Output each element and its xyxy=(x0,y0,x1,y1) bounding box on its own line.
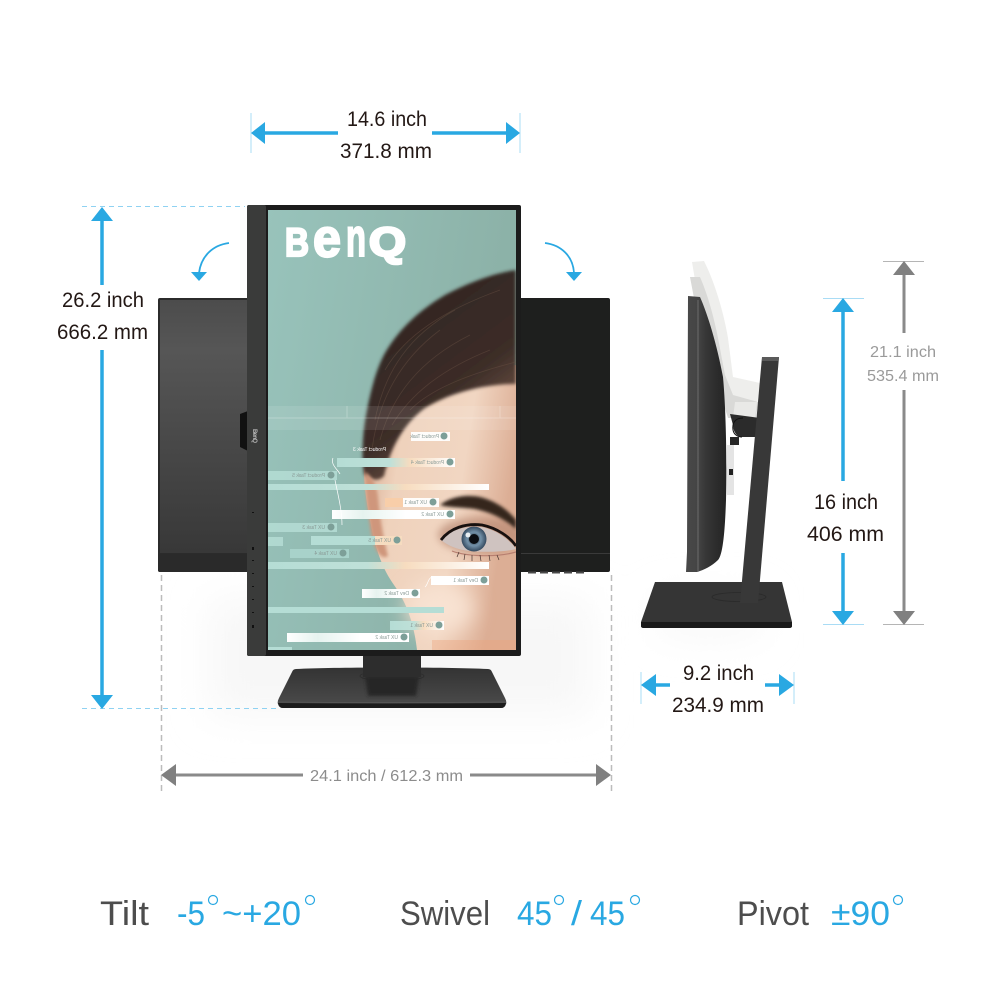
mirrored gantt labels: Product Task xyxy=(410,434,439,440)
rear details xyxy=(727,445,734,495)
rotated monitor back, right half xyxy=(515,298,610,572)
top width dimension: 14.6 inch: 371.8 mm xyxy=(340,140,432,163)
rotated monitor back, left half xyxy=(158,298,253,572)
total width dimension: 24.1 inch: 24.1 inch / 612.3 mm xyxy=(310,768,463,785)
front monitor in portrait: BenQ xyxy=(251,429,257,443)
mirrored gantt labels xyxy=(292,434,478,641)
spec: tilt: ~+20 xyxy=(222,895,301,933)
BenQ logo xyxy=(286,226,406,266)
depth dimension: 9.2 inch xyxy=(641,662,794,717)
front monitor in portrait xyxy=(247,205,522,656)
left height dimension: 26.2 inch: 666.2 mm xyxy=(57,321,148,344)
depth dimension: 9.2 inch: 9.2 inch xyxy=(683,662,754,685)
BenQ logo: Q xyxy=(369,219,406,265)
BenQ logo: e xyxy=(313,208,341,268)
hair strands xyxy=(372,290,516,450)
stand arm xyxy=(740,357,779,603)
total width dimension: 24.1 inch xyxy=(161,764,611,786)
face skin xyxy=(364,365,516,650)
eye xyxy=(441,525,516,561)
mirrored gantt labels: UX Task 5 xyxy=(368,538,391,544)
screen image xyxy=(268,208,522,650)
side height dimension: 16 inch xyxy=(807,298,884,625)
mirrored gantt labels: UX Task 4 xyxy=(314,551,337,557)
spec: pivot: Pivot xyxy=(737,895,810,933)
hair xyxy=(363,270,516,480)
mirrored gantt labels: Product Task 4 xyxy=(411,460,444,466)
spec: swivel xyxy=(400,895,640,933)
side view: ghost tilt positions xyxy=(690,261,760,420)
mirrored gantt labels: UX Task 1 xyxy=(410,623,433,629)
side total height dimension: 21.1 inch: 535.4 mm xyxy=(867,368,939,385)
bezel xyxy=(247,205,521,656)
base ring xyxy=(712,592,766,602)
hinge xyxy=(730,414,760,437)
BenQ logo: B xyxy=(285,221,309,265)
pivot arrows xyxy=(191,243,582,281)
mirrored gantt labels: Dev Task 2 xyxy=(384,591,409,597)
spec: tilt: Tilt xyxy=(100,895,150,933)
mirrored gantt labels: Dev Task 1 xyxy=(453,578,478,584)
mirrored gantt labels: UX Task 3 xyxy=(302,525,325,531)
spec: pivot xyxy=(737,895,902,933)
ear xyxy=(365,472,388,557)
spec: tilt xyxy=(100,895,314,933)
side height dimension: 16 inch: 16 inch xyxy=(814,491,878,514)
side total height dimension: 21.1 inch: 21.1 inch xyxy=(870,344,936,361)
spec: tilt: -5 xyxy=(177,895,205,933)
BenQ logo: n xyxy=(346,208,366,268)
front monitor stand xyxy=(278,652,506,708)
side panel xyxy=(686,296,726,572)
spec: swivel: 45 xyxy=(590,895,625,933)
side height dimension: 16 inch: 406 mm xyxy=(807,523,884,546)
side total height dimension: 21.1 inch xyxy=(867,261,939,625)
cheek highlight xyxy=(406,582,474,634)
mirrored gantt labels: UX Task 2 xyxy=(375,635,398,641)
top width dimension: 14.6 inch xyxy=(251,108,520,163)
depth dimension: 9.2 inch: 234.9 mm xyxy=(672,694,764,717)
eyebrow xyxy=(440,496,516,529)
spec: pivot: ±90 xyxy=(831,895,890,933)
mirrored gantt labels: Product Task 3 xyxy=(353,447,386,453)
side view monitor xyxy=(641,296,792,628)
width guide: dashed lines xyxy=(162,575,612,795)
floor shadows xyxy=(210,600,760,715)
mirrored gantt labels: Product Task 5 xyxy=(292,473,325,479)
left height dimension: 26.2 inch xyxy=(57,206,278,709)
side buttons xyxy=(252,512,254,628)
spec: swivel: 45 xyxy=(517,895,552,933)
spec: swivel: Swivel xyxy=(400,895,490,933)
left height dimension: 26.2 inch: 26.2 inch xyxy=(62,289,144,312)
gantt overlay xyxy=(268,406,516,650)
spec: swivel: / xyxy=(571,895,583,933)
monitor base xyxy=(641,582,792,628)
mirrored gantt labels: UX Task 1 xyxy=(404,500,427,506)
top width dimension: 14.6 inch: 14.6 inch xyxy=(347,108,427,131)
mirrored gantt labels: UX Task 2 xyxy=(421,512,444,518)
eye socket shadow xyxy=(438,517,522,553)
